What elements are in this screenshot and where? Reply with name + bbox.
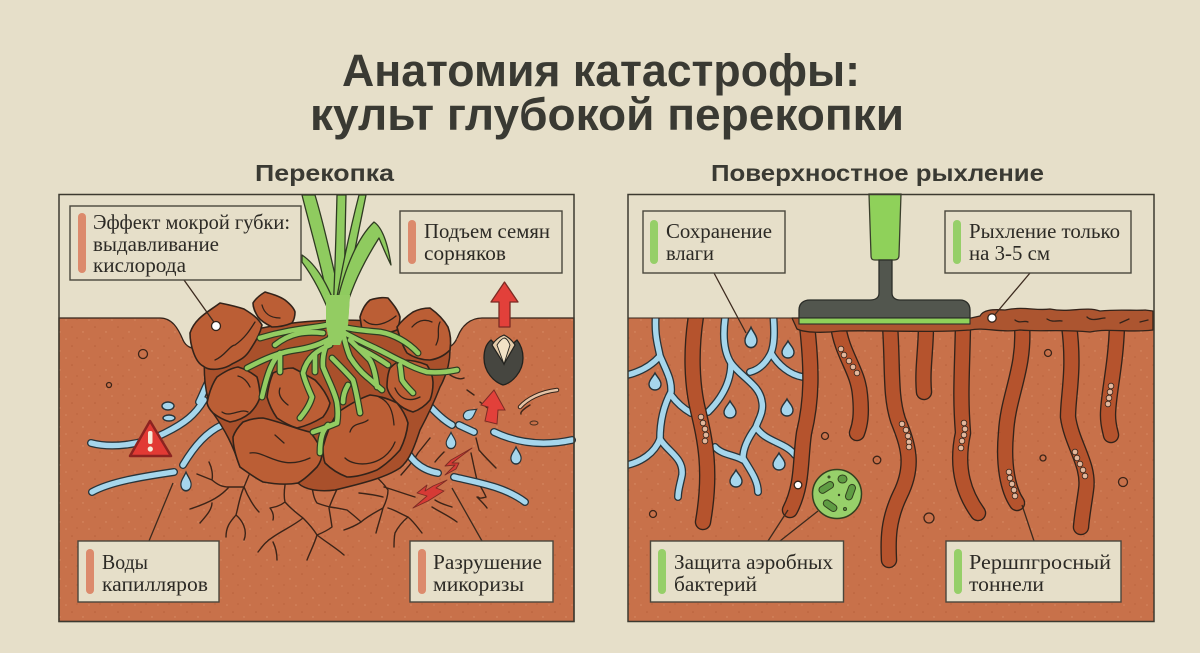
clod: right small	[387, 360, 433, 412]
arrow: seed rising	[491, 282, 518, 327]
title: культ глубокой перекопки	[310, 89, 904, 140]
soil	[628, 318, 1154, 622]
callout: wet sponge	[70, 206, 301, 280]
soil pores	[650, 350, 1128, 523]
water drops	[162, 402, 521, 491]
water network	[622, 312, 803, 497]
callout: depth: Рыхление только	[969, 220, 1120, 243]
water drops	[649, 327, 794, 487]
icon: weed seed	[484, 335, 523, 385]
callout: moisture: Сохранение	[666, 220, 772, 243]
plant	[247, 195, 457, 453]
callout: mycorrhiza: микоризы	[433, 573, 524, 596]
loosened top layer	[792, 308, 1153, 332]
mycorrhiza network	[190, 375, 496, 560]
clod: centre	[267, 368, 330, 428]
callout: capillary water	[78, 541, 219, 602]
clod: lower left	[207, 367, 260, 422]
earthworm tunnels	[693, 310, 1117, 560]
callout: bacteria: бактерий	[674, 573, 757, 596]
arrow: small red	[481, 390, 505, 424]
callout: wet sponge: кислорода	[93, 254, 186, 277]
heading: right: Поверхностное рыхление	[711, 160, 1044, 186]
callout: weed seeds	[400, 211, 562, 273]
handle	[869, 194, 901, 260]
clod: top right	[360, 298, 400, 333]
leaves	[302, 195, 343, 312]
title: Анатомия катастрофы:	[342, 45, 860, 96]
callout: depth	[945, 211, 1131, 273]
callout: wet sponge: Эффект мокрой губки:	[93, 211, 290, 234]
callout: mycorrhiza: Разрушение	[433, 551, 542, 574]
clod mass	[204, 320, 450, 491]
clod: top	[253, 292, 295, 327]
callout: worm tunnels: тоннели	[969, 573, 1044, 596]
callout: moisture	[643, 211, 785, 273]
heading: left: Перекопка	[255, 160, 394, 186]
clod: big left	[233, 418, 322, 484]
leader lines and marker	[149, 280, 482, 541]
clods of turned soil	[190, 292, 451, 491]
callout: worm tunnels	[946, 541, 1121, 602]
soil	[59, 318, 574, 622]
panel: deep digging	[59, 194, 574, 622]
clod creases	[215, 305, 440, 464]
worm	[520, 390, 557, 425]
loosened layer texture	[1015, 317, 1148, 323]
title	[310, 45, 904, 140]
callout: capillary water: Воды	[102, 551, 148, 574]
clod: upper left	[190, 303, 262, 369]
panel border	[59, 194, 574, 622]
trunk and roots	[247, 295, 457, 453]
callout: worm tunnels: Рершпгросный	[969, 551, 1111, 574]
neck	[799, 260, 970, 318]
callout: weed seeds: Подъем семян	[424, 220, 550, 243]
leader lines and markers	[714, 273, 1034, 541]
callout: wet sponge: выдавливание	[93, 233, 219, 256]
icon: mycorrhiza cracks	[413, 448, 472, 508]
callout: depth: на 3-5 см	[969, 242, 1050, 265]
clod: right	[397, 308, 451, 360]
callout: weed seeds: сорняков	[424, 242, 506, 265]
icon: aerobic bacteria	[812, 470, 862, 518]
blade	[799, 318, 970, 324]
hoe tool	[799, 194, 970, 324]
callout: capillary water: капилляров	[102, 573, 208, 596]
capillaries: broken water channels	[91, 373, 572, 502]
panel background	[628, 194, 1154, 622]
callout: mycorrhiza	[410, 541, 553, 602]
callout: bacteria: Защита аэробных	[674, 551, 834, 574]
panel: surface loosening	[622, 194, 1154, 622]
callout: moisture: влаги	[666, 242, 714, 265]
icon: warning triangle	[130, 421, 171, 456]
clod: big right	[323, 395, 408, 477]
soil pores	[106, 350, 148, 388]
worms in tunnels	[698, 346, 1114, 499]
panel background	[59, 194, 574, 622]
panel border	[628, 194, 1154, 622]
callout: bacteria	[650, 541, 844, 602]
